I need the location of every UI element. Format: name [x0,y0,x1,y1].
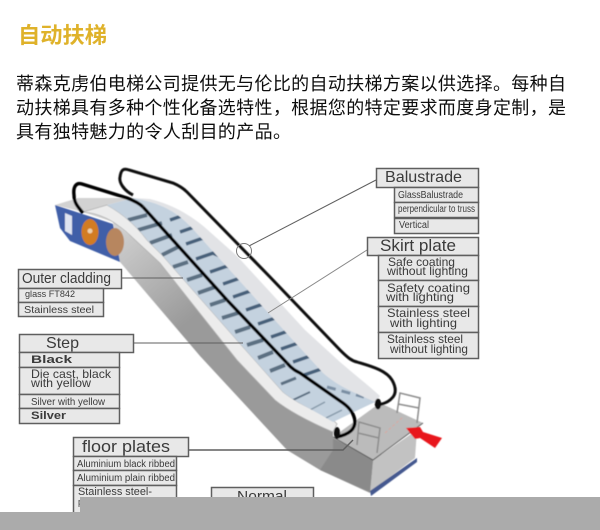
step lattice [170,211,364,397]
callout: step: Silver [31,410,67,422]
callout: outer cladding: Outer cladding [22,271,111,287]
callout: skirt plate: Safety coating [387,281,470,295]
callout: step: Silver with yellow [31,397,106,408]
escalator illustration [55,169,442,496]
handrail newel ends [334,398,381,439]
callout: skirt plate: with lighting [385,290,454,304]
truss end and motor [55,205,124,262]
callout: skirt plate: with lighting [389,316,457,330]
leader lines [121,180,376,450]
callout: balustrade: perpendicular to truss [398,204,475,215]
callout: skirt plate [368,237,478,358]
callout: skirt plate: Safe coating [388,255,455,269]
callout: outer cladding: glass FT842 [25,289,75,300]
front handrail [74,184,355,437]
intro paragraph: 具有独特魅力的令人刮目的产品。 [16,122,291,142]
step bars [128,215,342,418]
callout: balustrade: GlassBalustrade [398,190,463,201]
callout: balustrade: Balustrade [385,169,462,186]
balustrade glass [133,198,380,403]
callout: step: with yellow [30,376,91,390]
landing edge line [333,423,423,460]
callout: outer cladding [18,270,122,316]
callout: floor plates: plus [78,497,95,507]
grey footer band [0,497,600,530]
callout: floor plates [74,437,188,514]
landing railings [357,393,420,453]
landing guide marks [385,417,403,433]
top landing [55,198,133,222]
title: 自动扶梯 [18,23,107,48]
callout: step: Black [31,354,73,366]
intro paragraph: 蒂森克虏伯电梯公司提供无与伦比的自动扶梯方案以供选择。每种自 [16,74,566,94]
landing end face [370,430,417,492]
callout: step [20,334,134,424]
callout: step: Step [46,335,79,352]
back handrail [120,169,395,405]
callout: normal [212,488,314,508]
callout: floor plates: Aluminium plain ribbed [77,473,175,484]
callout: floor plates: Aluminium black ribbed [77,459,175,470]
blue base strip [370,458,417,496]
callout: skirt plate: Skirt plate [380,237,456,255]
callout: skirt plate: without lighting [389,342,468,356]
callout: normal: Normal [237,488,287,505]
callout: step: Die cast, black [31,367,112,381]
intro paragraph [16,74,566,142]
callout: floor plates: Stainless steel- [78,486,152,498]
callout: skirt plate: Stainless steel [387,332,463,346]
landing top [333,403,423,460]
callout: floor plates: floor plates [82,437,170,456]
callout: skirt plate: Stainless steel [387,306,470,320]
skirt strip [83,205,337,432]
steps band [107,198,375,422]
callout: skirt plate: without lighting [386,264,468,278]
intro paragraph: 动扶梯具有多种个性化备选特性，根据您的特定要求而度身定制，是 [16,98,566,118]
red arrow [406,427,442,448]
truss front face [320,438,373,492]
callout: balustrade: Vertical [399,220,429,231]
callout: balustrade [376,168,478,234]
callout: outer cladding: Stainless steel [24,304,94,316]
escalator truss side [113,222,375,493]
